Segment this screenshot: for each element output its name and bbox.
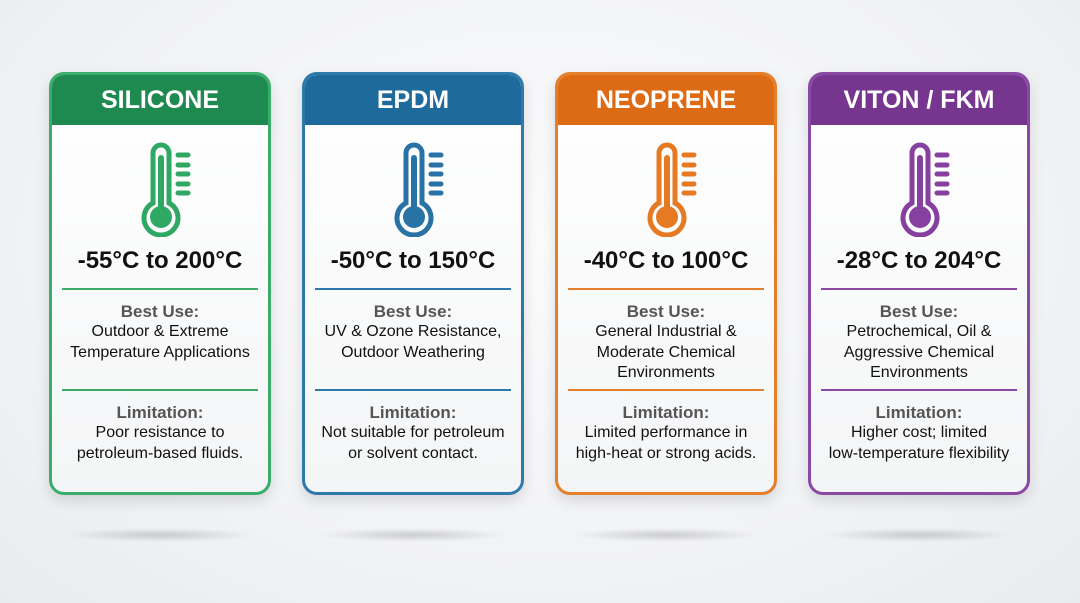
text: limitation: high-heat or strong acids.	[576, 444, 756, 462]
text: limitation: Limitation:	[117, 403, 203, 422]
text: best use	[595, 302, 737, 381]
text: limitation: Limitation:	[876, 403, 962, 422]
text: limitation: Not suitable for petroleum	[321, 424, 505, 441]
text: best use: Environments	[617, 364, 715, 381]
heading: viton: VITON / FKM	[844, 86, 994, 114]
icon: thermometer	[647, 142, 696, 237]
text: limitation: low-temperature flexibility	[829, 444, 1009, 462]
text: best use: Best Use:	[374, 302, 452, 321]
temperature range: -55°C to 200°C	[78, 247, 242, 274]
text: best use: Moderate Chemical	[597, 344, 735, 360]
icon: thermometer	[141, 142, 190, 237]
text: best use: Temperature Applications	[70, 344, 250, 360]
heading: viton	[811, 75, 1027, 125]
panel: silicone	[49, 72, 271, 495]
text: best use: Aggressive Chemical	[844, 344, 994, 360]
heading: neoprene: NEOPRENE	[596, 86, 736, 114]
heading: epdm	[305, 75, 521, 125]
text: limitation	[77, 403, 243, 462]
panel: epdm	[302, 72, 524, 495]
text: best use: Best Use:	[627, 302, 705, 321]
text: best use	[70, 302, 250, 360]
text: best use: Best Use:	[121, 302, 199, 321]
text: limitation: Limitation:	[370, 403, 456, 422]
text: limitation: Limitation:	[623, 403, 709, 422]
heading: silicone: SILICONE	[101, 86, 219, 114]
text: limitation: Poor resistance to	[96, 424, 224, 441]
panel: neoprene	[555, 72, 777, 495]
text: best use	[325, 302, 501, 360]
text: best use: Best Use:	[880, 302, 958, 321]
text: best use	[844, 302, 994, 381]
text: best use: Petrochemical, Oil &	[847, 323, 991, 340]
text: limitation	[321, 403, 505, 462]
text: limitation: Limited performance in	[585, 424, 747, 441]
text: limitation: petroleum-based fluids.	[77, 444, 243, 462]
text: best use: Environments	[870, 364, 968, 381]
heading: silicone	[52, 75, 268, 125]
text: limitation	[829, 403, 1010, 462]
text: best use: UV & Ozone Resistance,	[325, 323, 501, 340]
text: limitation: Higher cost; limited	[851, 424, 987, 441]
panel: viton	[808, 72, 1030, 495]
temperature range: -40°C to 100°C	[584, 247, 748, 274]
icon: thermometer	[900, 142, 950, 237]
text: best use: General Industrial &	[595, 323, 737, 340]
text: limitation: or solvent contact.	[348, 444, 478, 462]
heading: epdm: EPDM	[377, 86, 449, 114]
icon: thermometer	[394, 142, 444, 237]
text: limitation	[576, 403, 756, 462]
text: best use: Outdoor Weathering	[341, 344, 485, 360]
temperature range: -28°C to 204°C	[837, 247, 1001, 274]
text: best use: Outdoor & Extreme	[92, 323, 228, 340]
temperature range: -50°C to 150°C	[331, 247, 495, 274]
heading: neoprene	[558, 75, 774, 125]
